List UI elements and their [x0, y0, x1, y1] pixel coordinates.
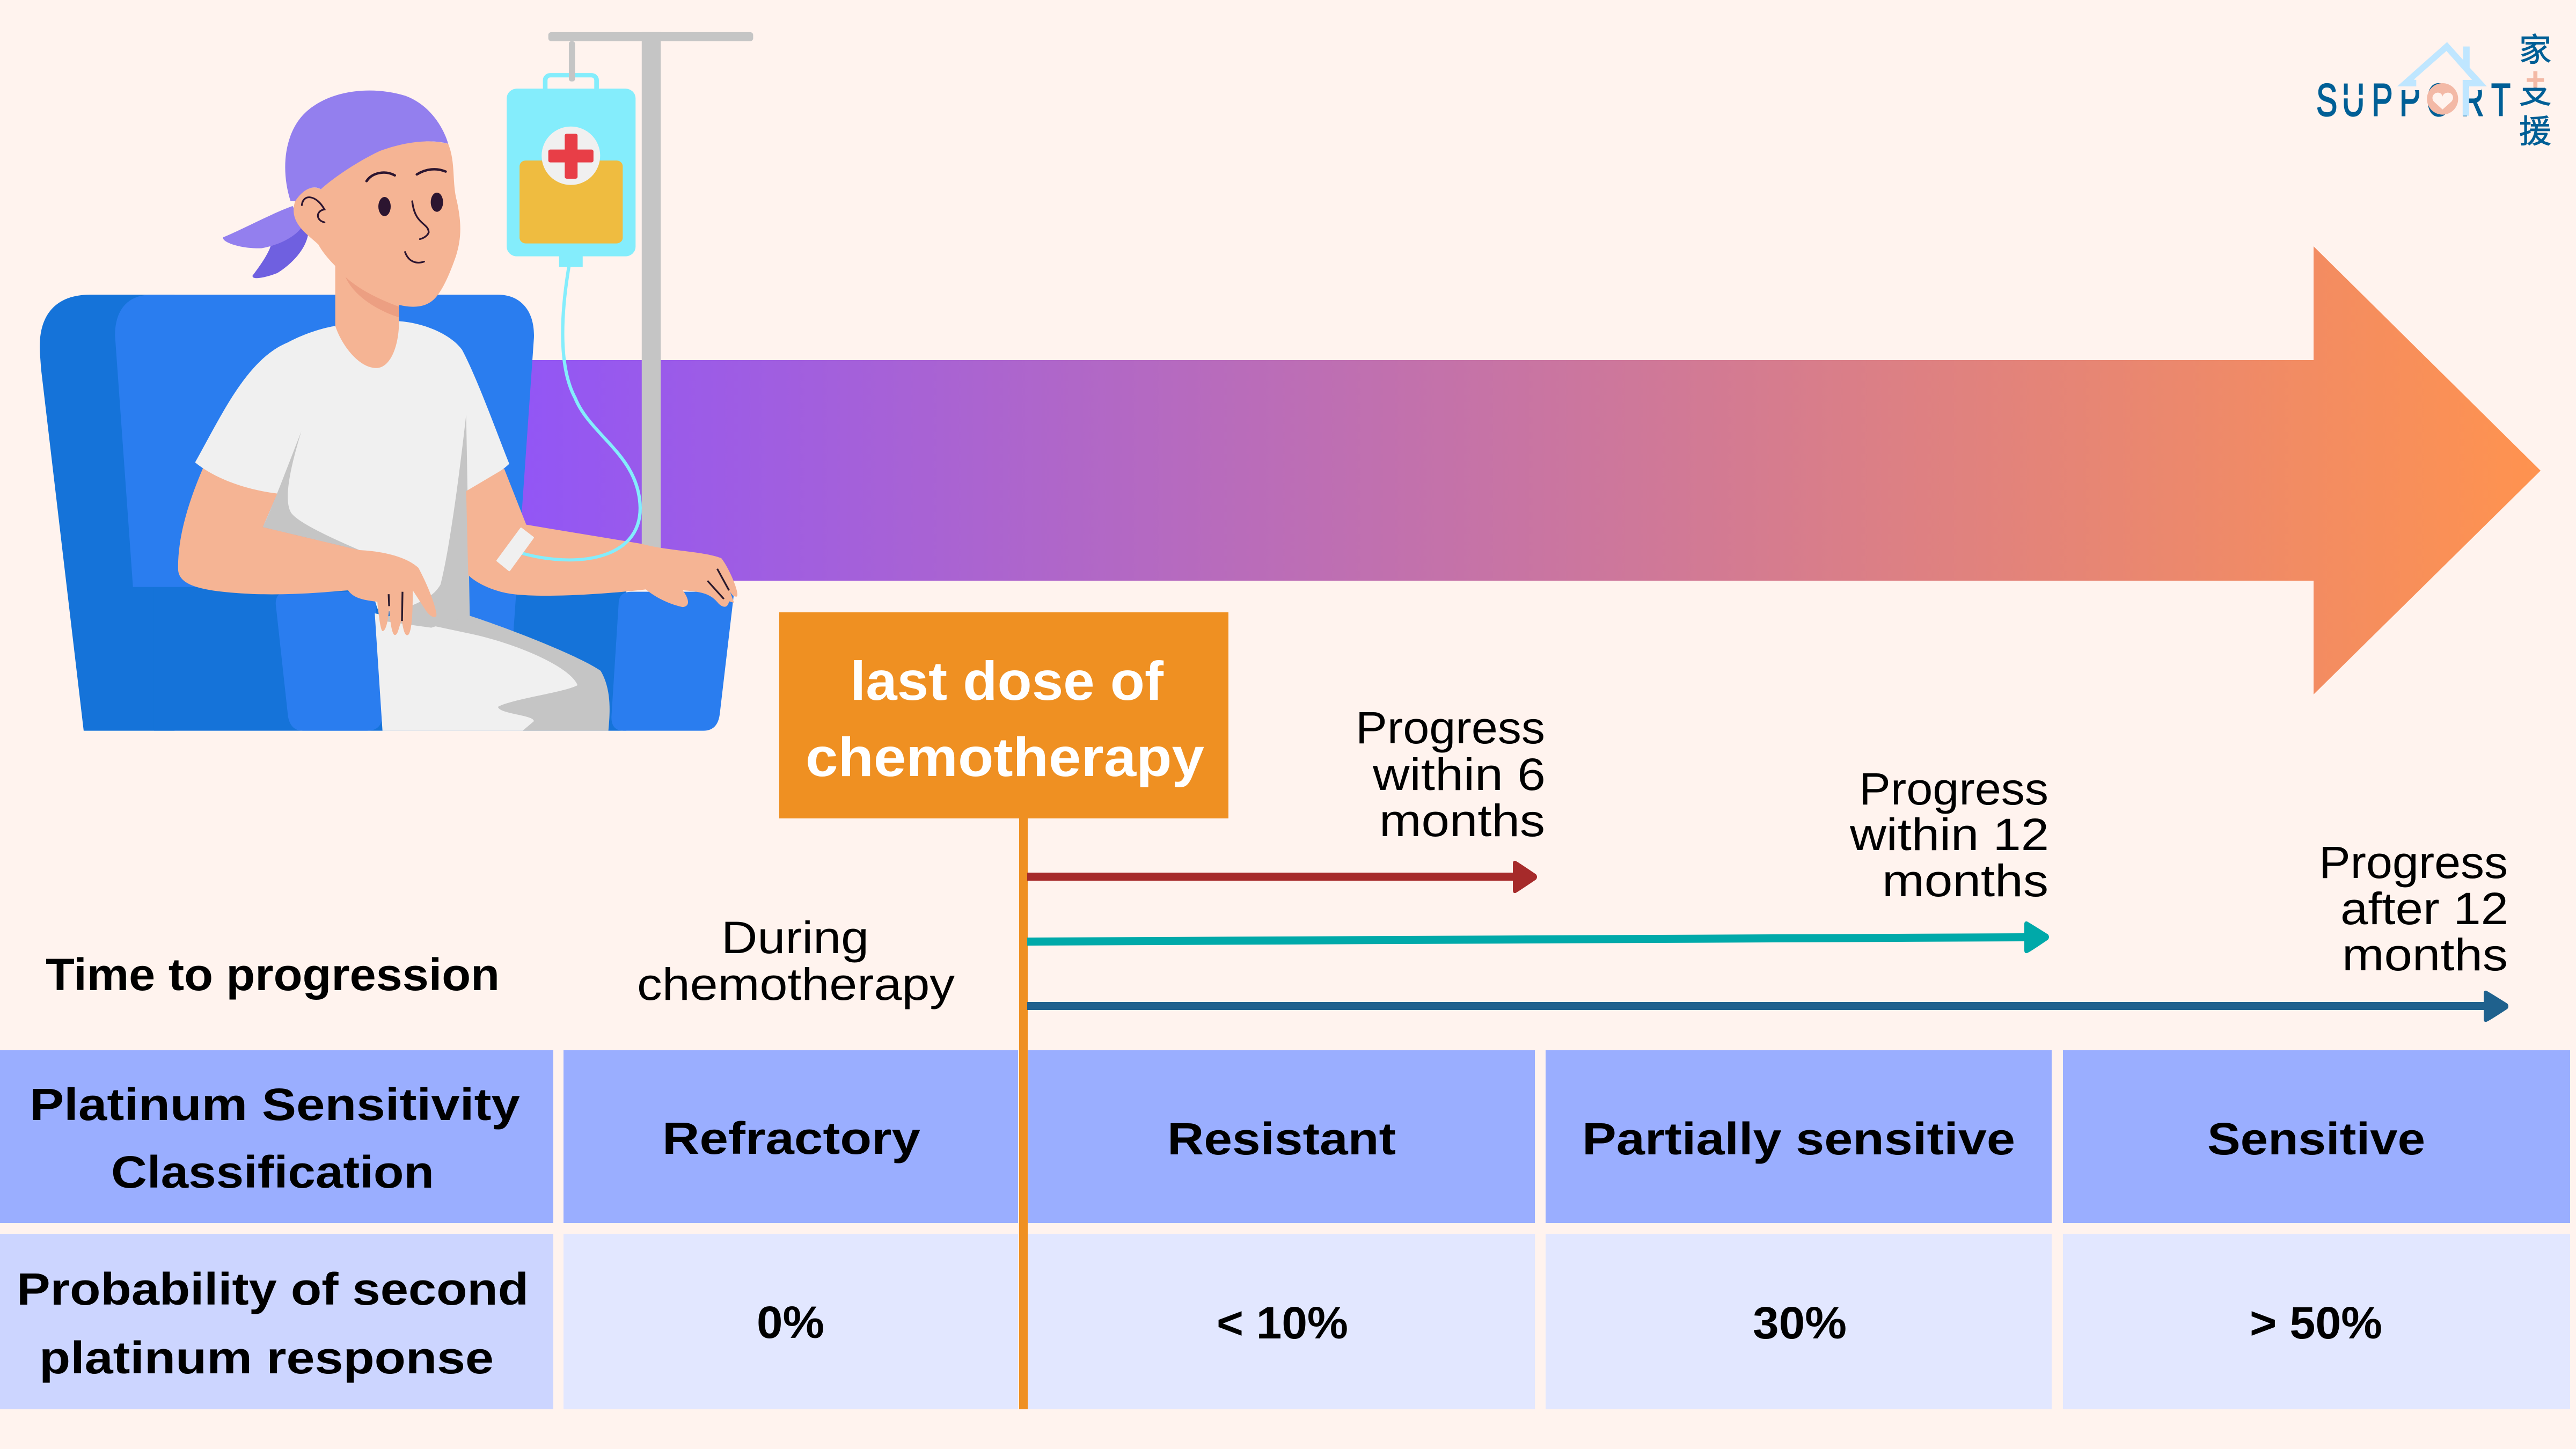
- cell: 0%: 0%: [757, 1297, 824, 1348]
- right arm and hand: [466, 469, 737, 607]
- label: progress within 12 months: Progress: [1859, 764, 2048, 814]
- cell: less than 10%: [1028, 1234, 1535, 1409]
- callout: last dose of chemotherapy: chemotherapy: [806, 727, 1204, 788]
- label: progress within 6 months: [1356, 702, 1546, 846]
- arrow: partially sensitive (teal): [1027, 921, 2049, 953]
- trousers: [375, 604, 610, 731]
- row header: Probability of second platinum response: Probability of second: [17, 1264, 529, 1314]
- cell: greater than 50%: [2063, 1234, 2570, 1409]
- label: progress after 12 months: Progress: [2319, 837, 2508, 888]
- cell: Partially sensitive: [1546, 1050, 2052, 1223]
- label: progress within 12 months: months: [1882, 855, 2048, 906]
- face features: [302, 169, 445, 262]
- illustration: patient receiving infusion in armchair: [40, 32, 753, 731]
- callout: last dose of chemotherapy: [779, 612, 1228, 818]
- cell: Refractory: Refractory: [662, 1113, 920, 1163]
- IV tube: [523, 267, 640, 560]
- cell: Resistant: [1028, 1050, 1535, 1223]
- head: [285, 91, 460, 317]
- label: progress after 12 months: after 12: [2340, 883, 2508, 934]
- logo: SUPPORT house: SUPPORT: [2316, 74, 2511, 126]
- row header: Platinum Sensitivity Classification: [0, 1050, 553, 1223]
- t-shirt: [195, 321, 509, 628]
- cell: 30%: 30%: [1753, 1298, 1847, 1348]
- label: during chemotherapy: [637, 912, 955, 1009]
- cell: Refractory: [564, 1050, 1018, 1223]
- label: during chemotherapy: chemotherapy: [637, 959, 955, 1009]
- cell: less than 10%: < 10%: [1217, 1298, 1348, 1348]
- row header: Platinum Sensitivity Classification: Classification: [111, 1147, 434, 1197]
- table: probability row: [0, 1234, 2570, 1409]
- neck: [335, 266, 399, 368]
- label: progress within 6 months: months: [1379, 795, 1545, 846]
- icon: IV hanger and bag: [507, 41, 635, 267]
- table: classification row: [0, 1050, 2570, 1223]
- label: progress after 12 months: [2319, 837, 2508, 980]
- cell: 30%: [1546, 1234, 2052, 1409]
- logo: SUPPORT house: 援: [2519, 114, 2551, 150]
- row header: Probability of second platinum response: platinum response: [39, 1333, 494, 1383]
- left arm and hand: [178, 469, 436, 635]
- upper arm under sleeve: [203, 458, 280, 501]
- label: during chemotherapy: During: [721, 912, 869, 963]
- label: time to progression: Time to progression: [46, 949, 500, 1000]
- label: progress after 12 months: months: [2342, 930, 2508, 980]
- logo: SUPPORT house: [2316, 32, 2551, 150]
- cell: 0%: [564, 1234, 1018, 1409]
- logo: SUPPORT house: 家: [2519, 32, 2551, 68]
- cell: greater than 50%: > 50%: [2250, 1298, 2382, 1348]
- label: progress within 12 months: within 12: [1849, 809, 2049, 860]
- cell: Partially sensitive: Partially sensitive: [1582, 1114, 2015, 1164]
- cell: Sensitive: Sensitive: [2207, 1114, 2425, 1164]
- cell: Resistant: Resistant: [1167, 1114, 1396, 1164]
- label: progress within 6 months: Progress: [1356, 702, 1545, 753]
- bandana tails: [223, 206, 308, 278]
- timeline gradient arrow: [515, 246, 2541, 694]
- vertical marker line: last dose: [1019, 805, 1028, 1409]
- bandage: [497, 529, 533, 570]
- label: progress within 12 months: [1849, 764, 2049, 906]
- logo: SUPPORT house: 支: [2519, 74, 2551, 110]
- callout: last dose of chemotherapy: last dose of: [850, 650, 1164, 712]
- row header: Platinum Sensitivity Classification: Platinum Sensitivity: [30, 1079, 520, 1130]
- arrow: sensitive (blue): [1027, 991, 2508, 1022]
- icon: armchair: [40, 295, 734, 731]
- label: progress within 6 months: within 6: [1372, 749, 1546, 800]
- icon: IV pole: [548, 32, 753, 552]
- arrow: resistant (red): [1027, 861, 1537, 893]
- cell: Sensitive: [2063, 1050, 2570, 1223]
- row header: Probability of second platinum response: [0, 1234, 553, 1409]
